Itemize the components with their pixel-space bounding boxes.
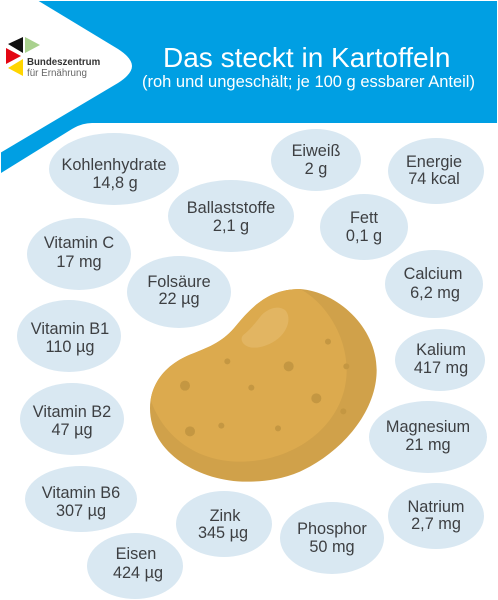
nutrient: Energie: Energie	[406, 153, 462, 171]
nutrient: Vitamin B1	[17, 300, 121, 372]
nutrient: Vitamin B6: Vitamin B6	[42, 484, 120, 502]
nutrient: Phosphor: 50 mg	[309, 538, 355, 556]
nutrient: Vitamin B6: 307 µg	[56, 502, 106, 520]
icon: logo triangles	[6, 37, 40, 76]
logo panel	[0, 0, 132, 153]
nutrient: Zink: 345 µg	[198, 524, 248, 542]
nutrient: Phosphor: Phosphor	[297, 520, 367, 538]
nutrient: Vitamin B2: 47 µg	[51, 421, 93, 439]
nutrient: Kohlenhydrate: Kohlenhydrate	[61, 156, 167, 174]
nutrient: Natrium: Natrium	[408, 498, 464, 516]
illustration: potato	[150, 289, 377, 482]
nutrient: Calcium	[385, 250, 483, 318]
nutrient: Folsäure: Folsäure	[147, 273, 211, 291]
nutrient: Folsäure	[127, 256, 231, 328]
nutrient: Vitamin C	[27, 218, 131, 290]
nutrient: Ballaststoffe	[168, 180, 294, 252]
nutrient: Eisen: 424 µg	[113, 564, 163, 582]
nutrient: Kohlenhydrate: 14,8 g	[92, 174, 138, 192]
nutrient: Kalium: 417 mg	[414, 359, 468, 377]
nutrient: Eiweiß: 2 g	[305, 160, 327, 178]
nutrient: Eiweiß	[271, 129, 361, 191]
nutrient: Vitamin C: 17 mg	[56, 253, 102, 271]
nutrient: Ballaststoffe: 2,1 g	[213, 217, 249, 235]
nutrient: Folsäure: 22 µg	[158, 290, 200, 308]
subtitle: (roh und ungeschält; je 100 g essbarer Anteil)	[142, 73, 475, 91]
nutrient: Eisen	[87, 533, 183, 599]
logo text: für Ernährung	[27, 68, 87, 79]
nutrient: Magnesium: Magnesium	[386, 418, 470, 436]
nutrient: Magnesium: 21 mg	[405, 436, 451, 454]
nutrient: Kalium	[395, 329, 485, 391]
nutrient: Vitamin B2	[20, 383, 124, 455]
nutrient: Energie	[388, 138, 484, 204]
nutrient: Magnesium	[369, 401, 487, 473]
logo text: Bundeszentrum	[27, 57, 101, 68]
nutrient: Vitamin B1: 110 µg	[46, 338, 94, 356]
nutrient: Calcium: Calcium	[404, 265, 462, 283]
nutrient: Fett	[320, 194, 408, 260]
nutrient: Eiweiß: Eiweiß	[292, 142, 340, 160]
nutrient: Fett: 0,1 g	[346, 227, 382, 245]
nutrient: Vitamin B2: Vitamin B2	[33, 403, 111, 421]
logo text	[27, 57, 101, 79]
nutrient: Natrium	[388, 483, 484, 549]
nutrient: Kalium: Kalium	[416, 341, 466, 359]
nutrient: Eisen: Eisen	[116, 545, 156, 563]
nutrient: Natrium: 2,7 mg	[411, 515, 461, 533]
nutrient: Vitamin C: Vitamin C	[44, 234, 114, 252]
nutrient: Vitamin B1: Vitamin B1	[31, 320, 109, 338]
nutrient: Ballaststoffe: Ballaststoffe	[187, 199, 275, 217]
nutrient: Zink	[176, 491, 272, 557]
nutrient: Vitamin B6	[25, 466, 137, 532]
header banner	[1, 1, 497, 173]
nutrient: Phosphor	[280, 502, 384, 574]
nutrient: Kohlenhydrate	[49, 133, 179, 205]
nutrient: Calcium: 6,2 mg	[410, 284, 460, 302]
nutrient: Fett: Fett	[350, 209, 378, 227]
nutrient: Energie: 74 kcal	[408, 170, 460, 188]
nutrient: Zink: Zink	[210, 507, 241, 525]
title: Das steckt in Kartoffeln	[163, 42, 450, 73]
